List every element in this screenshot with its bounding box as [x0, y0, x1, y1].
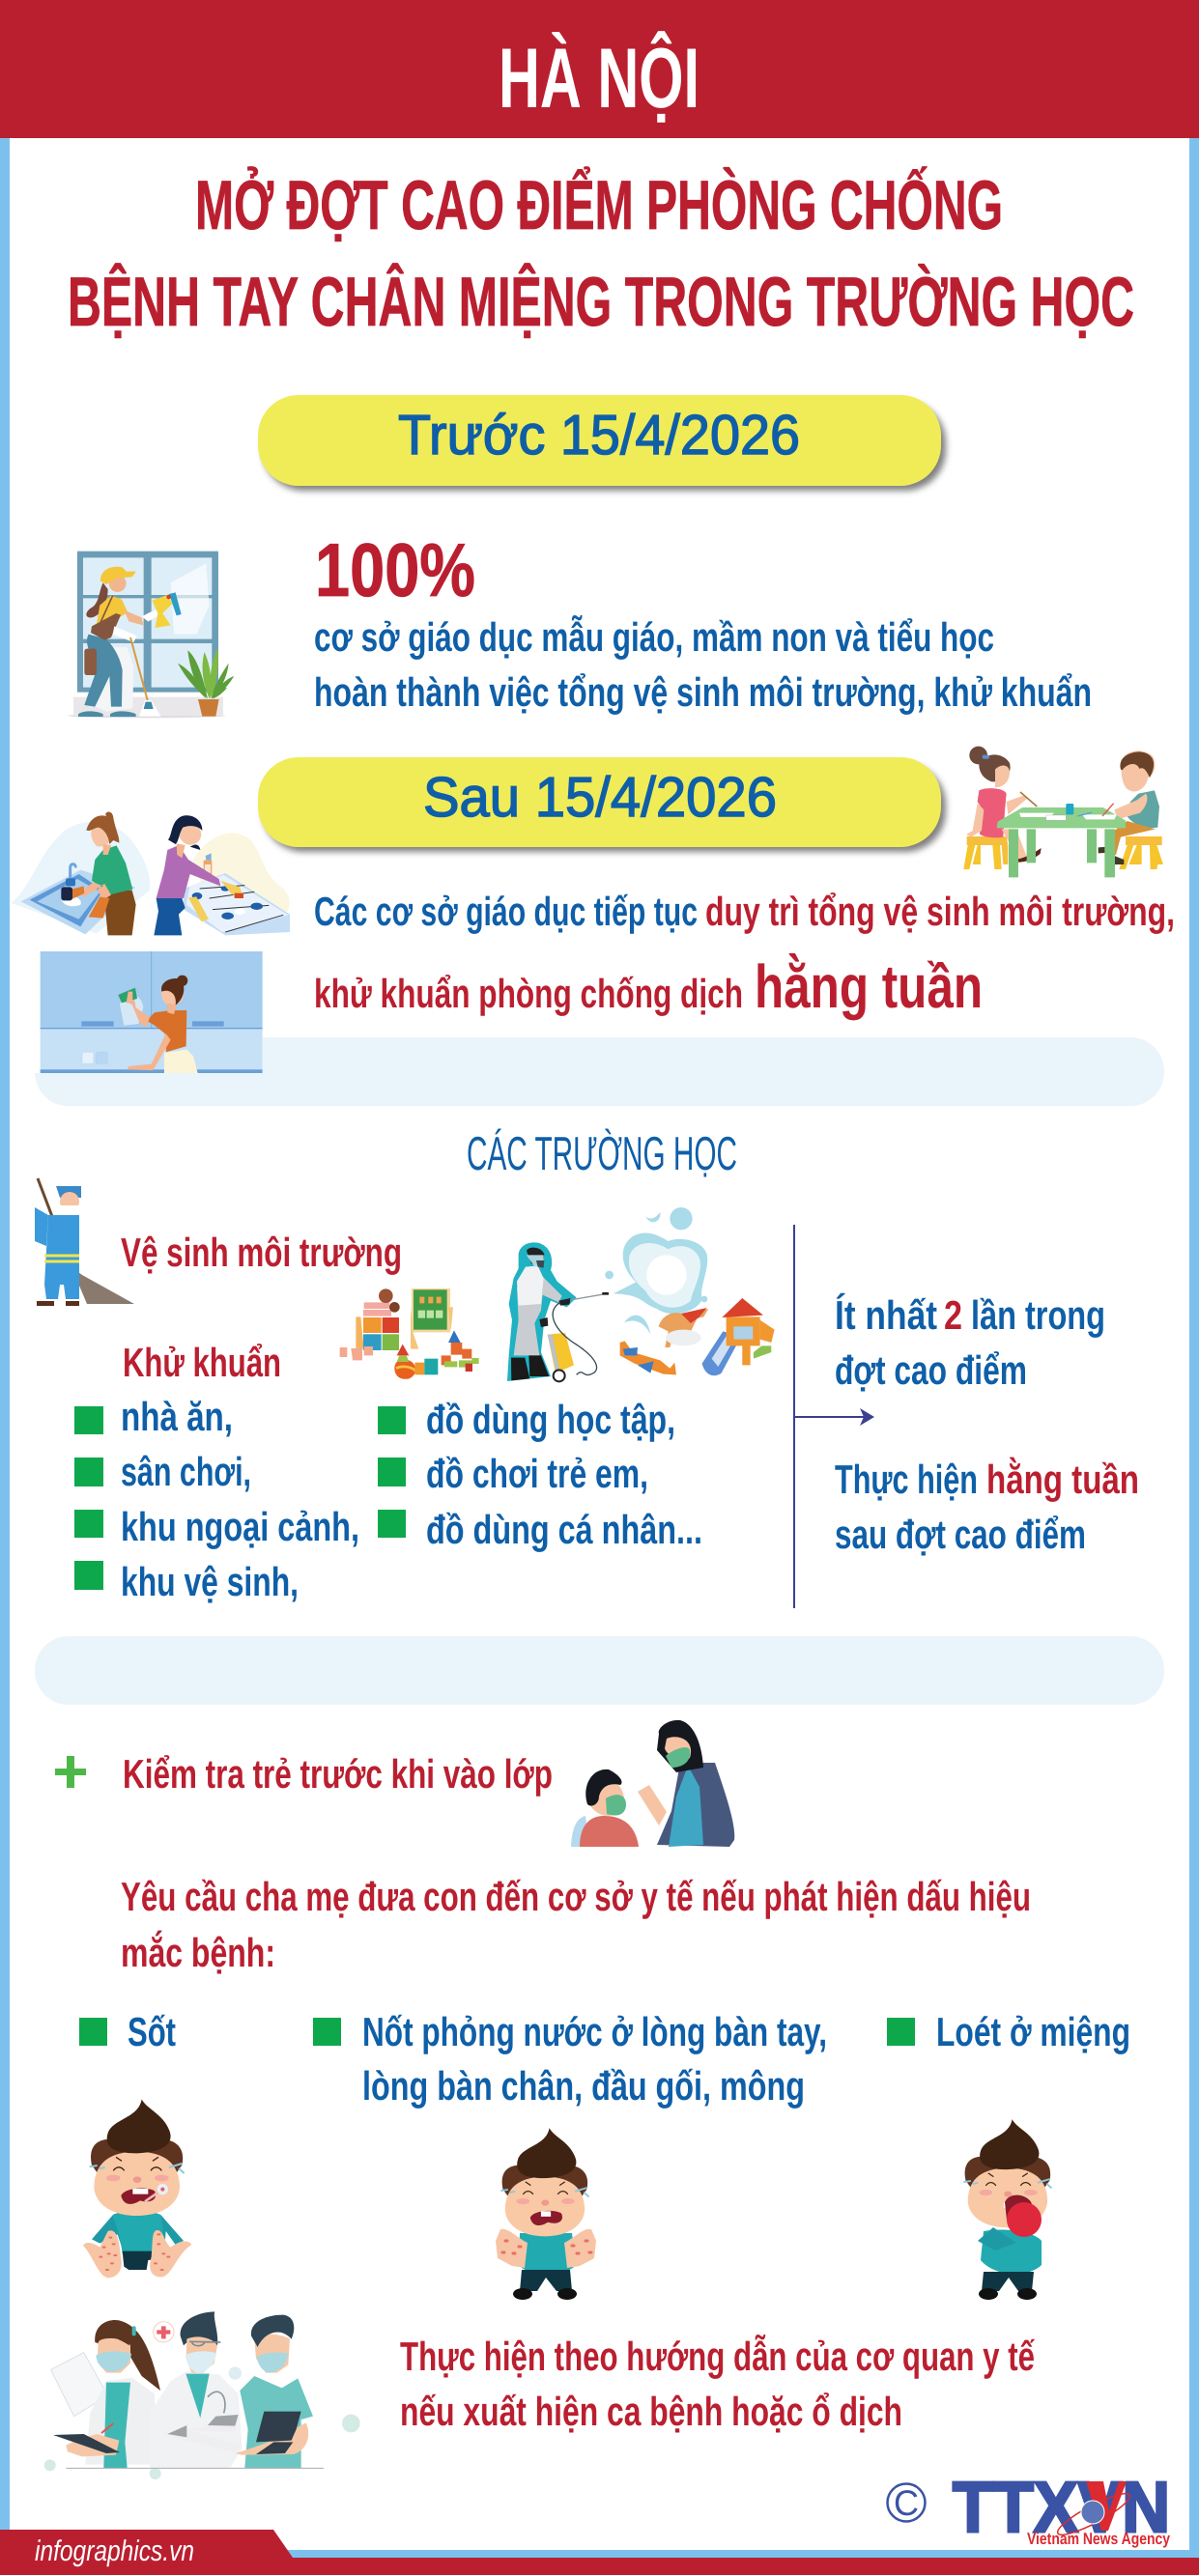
title	[68, 166, 1134, 341]
icon: plus	[55, 1756, 86, 1788]
text block: after date: hằng tuần	[755, 952, 983, 1021]
text: parent request: mắc bệnh:	[121, 1930, 275, 1975]
frequency text: sau đợt cao điểm	[835, 1512, 1086, 1557]
icon: copyright	[887, 2483, 926, 2523]
left list: khu vệ sinh,	[121, 1559, 299, 1604]
text block: after date: Các cơ sở giáo dục tiếp tục	[314, 889, 698, 934]
pill: after date: Sau 15/4/2026	[423, 766, 777, 829]
pill: before date	[258, 395, 946, 491]
text: follow health authority: nếu xuất hiện ca bệnh hoặc ổ dịch	[400, 2389, 902, 2434]
heading: schools: CÁC TRƯỜNG HỌC	[467, 1128, 737, 1180]
frequency text: 2	[944, 1292, 962, 1338]
frequency text: lần trong	[971, 1292, 1105, 1338]
logo: TTXVN: Vietnam News Agency	[1027, 2530, 1170, 2548]
icon: boy with fever	[83, 2099, 191, 2278]
icon: copyright: C	[894, 2483, 919, 2523]
pill: before date: Trước 15/4/2026	[398, 404, 800, 467]
text block: before date: cơ sở giáo dục mẫu giáo, mầm non và tiểu học	[314, 614, 994, 660]
header band	[0, 0, 1199, 138]
icon: boy with mouth sore	[963, 2119, 1052, 2300]
stat: 100 percent	[314, 527, 1092, 715]
icon: disinfecting toys and playground	[340, 1207, 775, 1381]
bullets	[74, 1406, 406, 1590]
left list: sân chơi,	[121, 1449, 251, 1494]
pale band 1	[35, 1037, 1164, 1106]
pill: after date	[258, 757, 946, 852]
icon: medical team	[44, 2311, 360, 2479]
disinfection list	[74, 1340, 702, 1604]
left list: khu ngoại cảnh,	[121, 1504, 359, 1549]
text: check children: Kiểm tra trẻ trước khi vào lớp	[123, 1751, 553, 1797]
frequency text: đợt cao điểm	[835, 1347, 1027, 1393]
icon: women cleaning kitchen	[12, 811, 290, 1074]
frequency text: Ít nhất	[835, 1292, 937, 1338]
footer band: infographics.vn	[35, 2535, 194, 2567]
divider with arrow	[794, 1225, 874, 1608]
symptom bullets	[79, 2018, 915, 2046]
heading: disinfection: Khử khuẩn	[123, 1340, 281, 1385]
right list: đồ chơi trẻ em,	[426, 1451, 648, 1496]
text: parent request	[121, 1874, 1031, 1975]
text: environmental cleaning: Vệ sinh môi trường	[121, 1230, 402, 1275]
left list	[121, 1394, 359, 1604]
left list: nhà ăn,	[121, 1394, 233, 1439]
text: follow health authority	[400, 2334, 1035, 2434]
icon: street sweeper	[35, 1178, 134, 1306]
text block: before date	[314, 614, 1092, 715]
symptom labels	[128, 2009, 1130, 2109]
logo: TTXVN: TTXVN	[953, 2467, 1170, 2547]
frequency text: Thực hiện	[835, 1457, 978, 1502]
stat: 100 percent: 100%	[315, 527, 475, 612]
icon: woman cleaning window	[68, 552, 234, 718]
header band: HÀ NỘI	[499, 30, 699, 126]
right list	[426, 1397, 702, 1552]
icon: boy with blisters on hands	[496, 2128, 596, 2300]
pale band 2	[35, 1636, 1164, 1705]
icon: children at table	[963, 747, 1163, 877]
symptom labels: Sốt	[128, 2009, 176, 2054]
text block: after date	[314, 889, 1175, 1021]
icon: nurse checking child	[571, 1720, 734, 1847]
symptom labels: Nốt phỏng nước ở lòng bàn tay,	[362, 2009, 827, 2054]
symptoms	[79, 2009, 1130, 2109]
text block: after date: khử khuẩn phòng chống dịch	[314, 971, 743, 1016]
footer band	[0, 2530, 1199, 2575]
frequency text: hằng tuần	[986, 1457, 1139, 1502]
right list: đồ dùng học tập,	[426, 1397, 675, 1442]
right list: đồ dùng cá nhân...	[426, 1507, 702, 1552]
frequency text	[835, 1292, 1139, 1557]
symptom labels: Loét ở miệng	[936, 2009, 1130, 2054]
symptom labels: lòng bàn chân, đầu gối, mông	[362, 2063, 805, 2109]
